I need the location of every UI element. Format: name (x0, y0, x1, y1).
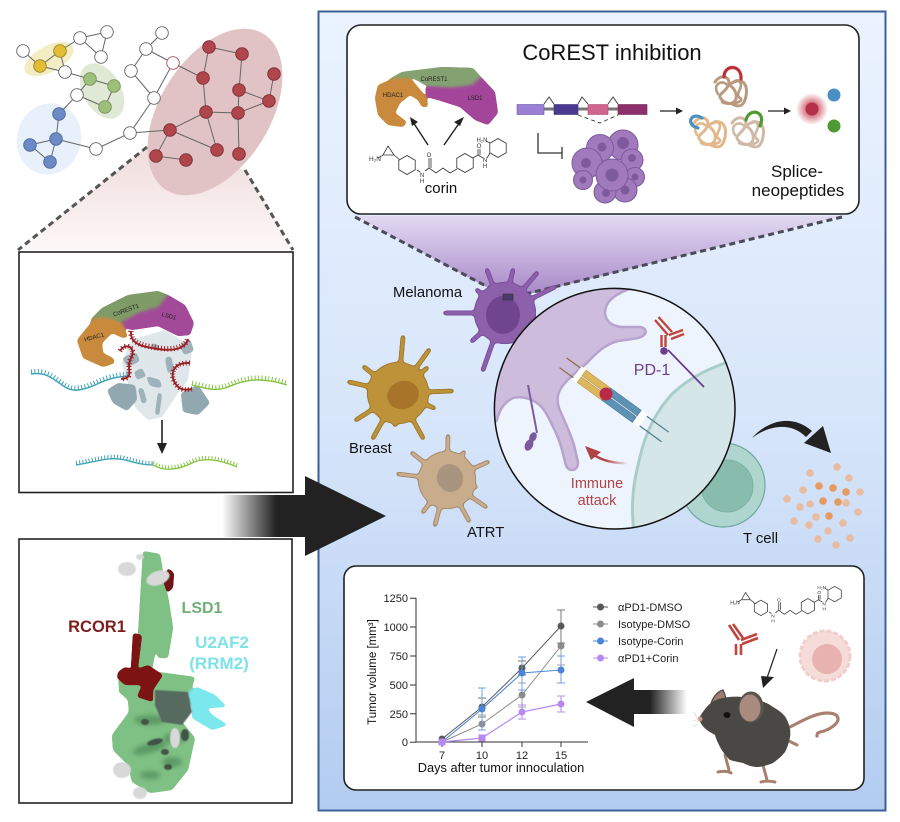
chart legend: αPD1+Corin (618, 653, 678, 665)
label: ATRT: ATRT (467, 525, 504, 541)
icon: antibody (729, 624, 758, 655)
arrows: corin targets (410, 117, 464, 145)
T cell membrane (630, 362, 734, 527)
HDAC1 CoREST1 LSD1 complex: CoREST1 (113, 303, 141, 318)
molecule: corin (369, 138, 506, 185)
label: PD-1: PD-1 (634, 362, 670, 379)
HDAC1 CoREST1 LSD1 complex: LSD1 (161, 312, 177, 322)
label: Splice-neopeptides: neopeptides (752, 181, 844, 200)
splice neopeptide structures (691, 67, 764, 147)
network diagram (9, 5, 310, 250)
series: aPD1+Corin (438, 696, 565, 746)
card: CoREST inhibition (347, 25, 859, 214)
molecule: corin small: O (817, 590, 821, 596)
spliceosome shape (107, 330, 210, 420)
molecule: corin small: N (771, 614, 775, 620)
protein complex (375, 67, 498, 127)
molecule: corin small: H₂N (730, 601, 740, 607)
molecule: corin small (730, 585, 841, 624)
molecule: corin: O (427, 153, 432, 159)
arrow: mouse to chart (586, 678, 687, 727)
melanoma membrane (495, 289, 647, 472)
molecule: corin: N (420, 173, 424, 179)
arrow: large black arrow into panel (222, 476, 386, 556)
heading: CoREST inhibition (522, 40, 702, 65)
neopeptide dots (796, 88, 840, 132)
molecule: corin small: H (771, 618, 775, 624)
line chart: tumor volume: 500 (390, 680, 408, 692)
label: RCOR1: RCOR1 (68, 618, 126, 636)
label: U2AF2 (RRM2): U2AF2 (195, 633, 249, 652)
molecule: corin: H₂N (369, 156, 381, 163)
HDAC1 CoREST1 LSD1 complex (77, 291, 194, 367)
molecule: corin small: O (777, 597, 781, 603)
label: LSD1: LSD1 (182, 600, 223, 617)
line chart: tumor volume: 10 (476, 750, 488, 762)
molecule: corin: O (477, 144, 482, 150)
line chart: tumor volume: 15 (555, 750, 567, 762)
PD-1 receptor (660, 347, 704, 387)
RNA strands (31, 331, 287, 469)
line chart: tumor volume: 0 (402, 737, 408, 749)
arrow: immune attack (585, 446, 628, 463)
line chart: tumor volume: Tumor volume [mm³] (367, 619, 379, 725)
arrow: injection into mouse (761, 649, 777, 688)
label: corin: corin (425, 180, 457, 197)
line chart: tumor volume (367, 593, 588, 775)
cell: T cell (681, 443, 765, 527)
HDAC1 CoREST1 LSD1 complex: HDAC1 (84, 332, 105, 343)
label: Immune attack: Immune (571, 476, 623, 492)
arrow: to presented peptides (768, 108, 791, 114)
density map (112, 551, 228, 799)
protein complex: LSD1 (467, 96, 483, 102)
panel: spliceosome schematic (19, 252, 293, 492)
protein complex: CoREST1 (420, 77, 448, 83)
splicing schematic (517, 97, 647, 123)
molecule: corin small: N (822, 601, 826, 607)
inhibition symbol (538, 133, 562, 159)
line chart: tumor volume: 1000 (384, 622, 408, 634)
protein complex: HDAC1 (383, 93, 404, 99)
icon: anti-PD-1 antibody (655, 317, 684, 347)
arrow: spliced product (157, 420, 167, 454)
arrow: curved secretion (752, 421, 831, 453)
panel: cryo-EM density map (19, 539, 292, 803)
chart legend: Isotype-Corin (618, 636, 683, 648)
magnified synapse circle (494, 288, 736, 530)
panel: main blue mechanism panel (318, 12, 886, 810)
card: tumor growth experiment (344, 566, 864, 790)
icon: tumor cell (800, 631, 850, 681)
label: Breast: Breast (349, 441, 392, 457)
icon: tumor cell cluster (572, 130, 644, 203)
label: Splice-neopeptides: Splice- (771, 162, 823, 181)
line chart: tumor volume: 1250 (384, 593, 408, 605)
T cell receptor complex (558, 356, 670, 443)
line chart: tumor volume: 12 (516, 750, 528, 762)
line chart: tumor volume: 250 (390, 709, 408, 721)
label: Immune attack: attack (578, 493, 617, 509)
molecule: corin: H (420, 179, 424, 185)
molecule: corin: H₂N (476, 138, 488, 144)
chart legend: Isotype-DMSO (618, 619, 691, 631)
molecule: corin small: H₂N (817, 585, 827, 591)
series: Isotype-Corin (438, 656, 565, 746)
zoom wedge from melanoma to CoREST card (355, 216, 842, 298)
arrow: to peptides (660, 108, 683, 114)
series: Isotype-DMSO (438, 642, 565, 746)
series: aPD1-DMSO (438, 610, 565, 742)
PD-L1 ligand (523, 385, 538, 452)
label: T cell: T cell (743, 531, 778, 547)
molecule: corin small: H (822, 606, 826, 612)
molecule: corin: H (483, 164, 487, 170)
secreted dots (783, 463, 864, 549)
cell: ATRT (398, 436, 488, 525)
cell: melanoma (445, 270, 560, 370)
line chart: tumor volume: 750 (390, 651, 408, 663)
molecule: corin: N (483, 158, 487, 164)
label: Melanoma: Melanoma (393, 285, 463, 301)
icon: mouse (693, 690, 838, 782)
cell: breast (349, 337, 452, 438)
chart legend: αPD1-DMSO (618, 602, 683, 614)
label: U2AF2 (RRM2): (RRM2) (189, 654, 249, 673)
line chart: tumor volume: Days after tumor innoculation (418, 760, 584, 775)
chart legend (593, 602, 691, 665)
line chart: tumor volume: 7 (439, 750, 445, 762)
